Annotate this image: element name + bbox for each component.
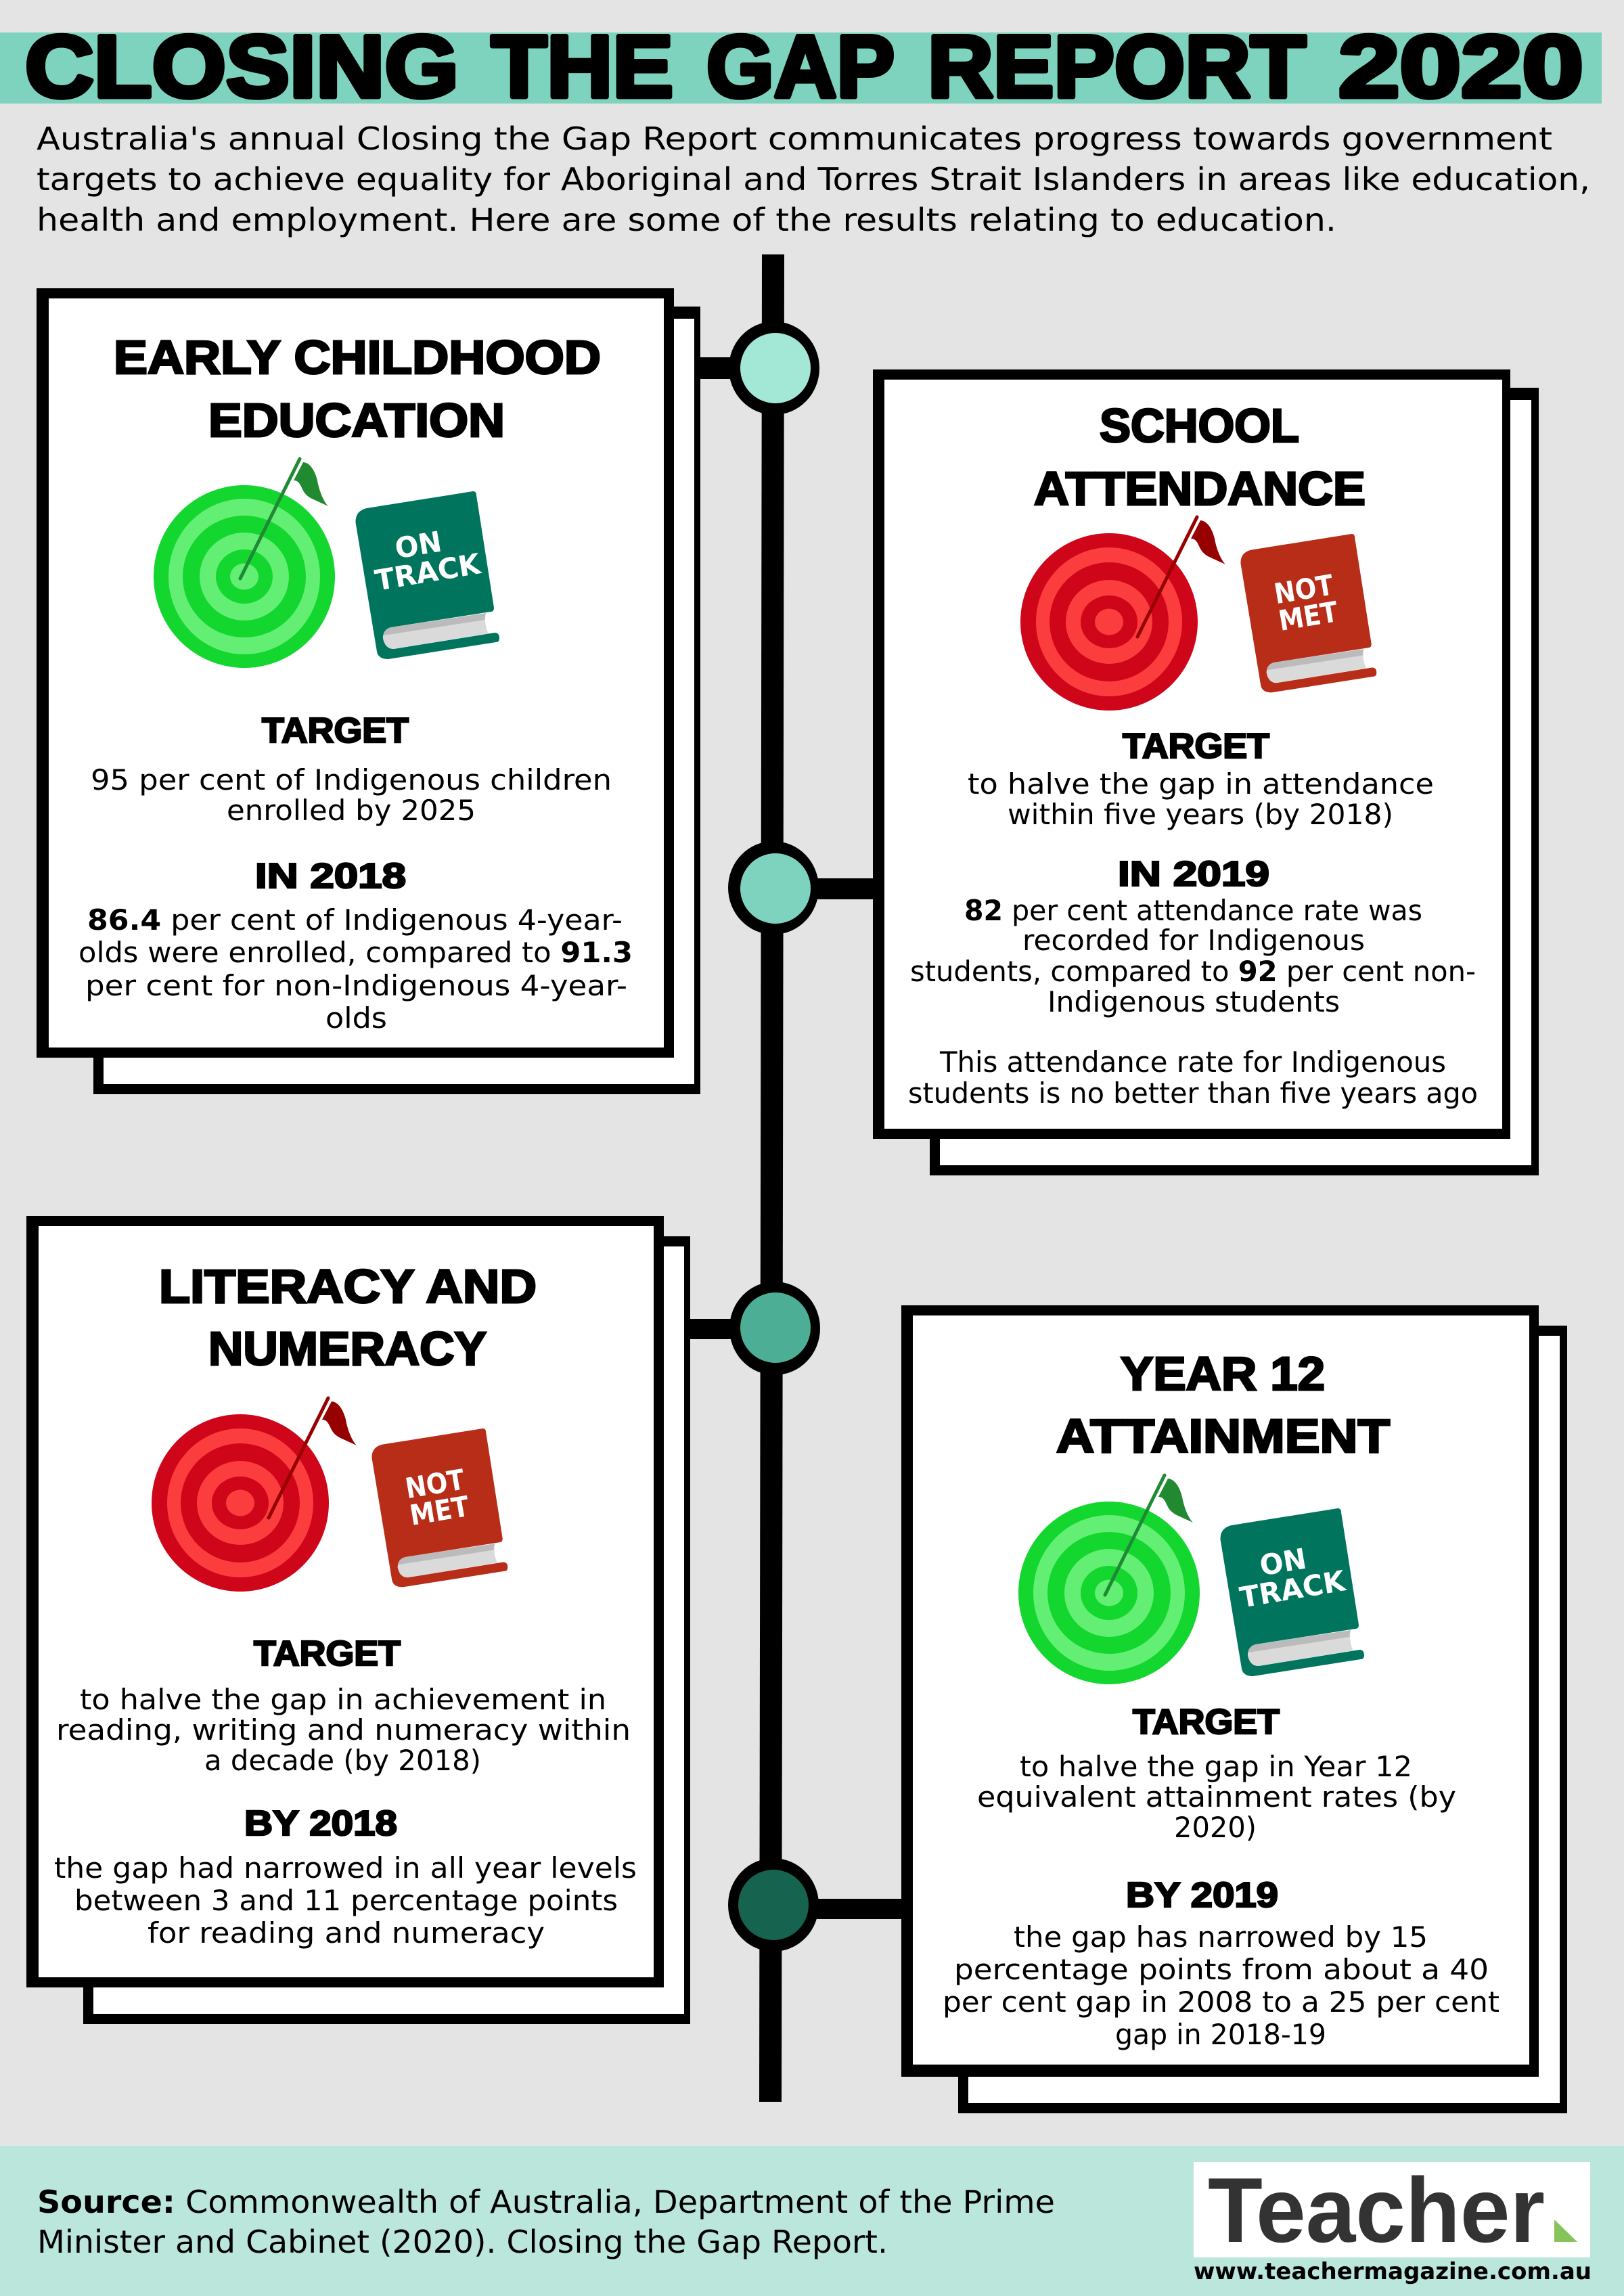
front page [873,369,1510,1139]
result text: olds [325,1001,387,1035]
target text: enrolled by 2025 [227,794,476,827]
target text: reading, writing and numeracy within [56,1713,631,1747]
back page [93,307,700,1094]
title banner: THE [491,17,673,116]
heading [1056,1347,1390,1462]
target text: within five years (by 2018) [1008,798,1393,831]
source citation [37,2184,1055,2260]
website address: www.teachermagazine.com.au [1194,2258,1592,2285]
connector: early childhood [697,357,751,379]
panel: school attendance [873,369,1539,1175]
result text: the gap had narrowed in all year levels [54,1851,637,1885]
result text: recorded for Indigenous [1022,924,1365,957]
target text [91,763,612,827]
heading: ATTAINMENT [1056,1410,1390,1462]
target text: to halve the gap in Year 12 [1020,1750,1412,1783]
result text [943,1920,1499,2051]
front page [901,1305,1539,2077]
panel: literacy and numeracy [26,1216,690,2024]
intro text: health and employment. Here are some of the results relating to education. [37,202,1336,238]
back page [958,1326,1567,2113]
front page [26,1216,664,1987]
result label: BY 2019 [1126,1876,1278,1915]
target text [977,1750,1456,1844]
result label: IN 2019 [1118,855,1269,894]
timeline node 4 [728,1858,819,1952]
result label: BY 2018 [244,1804,397,1843]
source citation: Minister and Cabinet (2020). Closing the Gap Report. [37,2224,888,2260]
result text: for reading and numeracy [148,1916,545,1950]
result label: IN 2018 [255,857,406,896]
target text [56,1683,631,1777]
icon: on track book: TRACK [1238,1564,1349,1615]
target text: a decade (by 2018) [204,1744,481,1777]
icon: on track book [1220,1508,1364,1676]
icon: on track book [355,491,499,659]
title banner: GAP [706,17,895,116]
intro text: Australia's annual Closing the Gap Report communicates progress towards government [37,120,1552,157]
target text: to halve the gap in achievement in [80,1683,606,1716]
connector: year 12 [798,1899,905,1919]
heading [114,331,601,447]
icon: green target with flag [1018,1475,1200,1684]
timeline node 3 [729,1282,820,1375]
target text: equivalent attainment rates (by [977,1780,1456,1814]
timeline node 2 [728,841,819,935]
heading: LITERACY AND [159,1260,537,1313]
intro text [37,120,1590,238]
back page [83,1236,690,2024]
heading: ATTENDANCE [1034,462,1366,515]
heading: YEAR 12 [1121,1347,1325,1400]
note text: students is no better than five years ago [908,1077,1478,1110]
icon: not met book [371,1428,508,1587]
title banner: 2020 [1338,17,1583,116]
title banner [0,17,1602,116]
result text [54,1851,637,1950]
icon: red target with flag [152,1398,357,1592]
title banner: REPORT [928,17,1306,116]
title banner: CLOSING [25,17,459,116]
icon: not met book: MET [407,1489,472,1532]
heading: EDUCATION [208,394,505,447]
result text: percentage points from about a 40 [954,1953,1489,1986]
result text: Indigenous students [1047,985,1340,1018]
target text: to halve the gap in attendance [968,767,1434,801]
target label: TARGET [1123,727,1269,766]
icon: not met book: MET [1276,595,1340,637]
result text: per cent gap in 2008 to a 25 per cent [943,1985,1499,2019]
timeline node 1 [729,321,819,415]
result text: olds were enrolled, compared to 91.3 [78,936,633,969]
heading [1034,399,1366,515]
target label: TARGET [262,711,409,750]
target text: 2020) [1174,1811,1257,1844]
heading [159,1260,537,1375]
note text [908,1045,1478,1110]
result text: 86.4 per cent of Indigenous 4-year- [87,903,623,937]
result text: the gap has narrowed by 15 [1014,1920,1428,1954]
panel: early childhood education [37,288,700,1094]
result text: between 3 and 11 percentage points [74,1884,618,1917]
target text [968,767,1434,831]
icon: green target with flag [154,459,335,668]
result text [78,903,633,1035]
source citation: Source: Commonwealth of Australia, Department of the Prime [37,2184,1055,2220]
result text: gap in 2018-19 [1115,2018,1326,2051]
heading: NUMERACY [208,1322,487,1375]
icon: not met book: NOT [1271,568,1336,610]
intro text: targets to achieve equality for Aboriginal and Torres Strait Islanders in areas like education, [37,161,1590,198]
icon: not met book: NOT [403,1462,468,1505]
target label: TARGET [1133,1703,1280,1742]
icon: red target with flag [1020,517,1225,711]
panel: year 12 attainment [901,1305,1567,2113]
result text: 82 per cent attendance rate was [964,894,1422,927]
target label: TARGET [254,1634,401,1673]
connector: literacy [687,1319,751,1339]
note text: This attendance rate for Indigenous [939,1045,1446,1079]
back page [930,388,1539,1175]
result text [910,894,1476,1018]
front page [37,288,674,1058]
result text: students, compared to 92 per cent non- [910,955,1476,988]
timeline spine [759,254,784,2102]
icon: not met book [1240,534,1376,692]
heading: EARLY CHILDHOOD [114,331,601,384]
heading: SCHOOL [1100,399,1299,452]
icon: on track book: ON [392,525,444,565]
connector: school attendance [798,878,876,899]
icon: on track book: TRACK [373,547,484,598]
logo: Teacher: Teacher [1208,2159,1545,2261]
icon: on track book: ON [1257,1542,1309,1582]
footer band [0,2146,1624,2296]
result text: per cent for non-Indigenous 4-year- [85,969,627,1002]
target text: 95 per cent of Indigenous children [91,763,612,796]
